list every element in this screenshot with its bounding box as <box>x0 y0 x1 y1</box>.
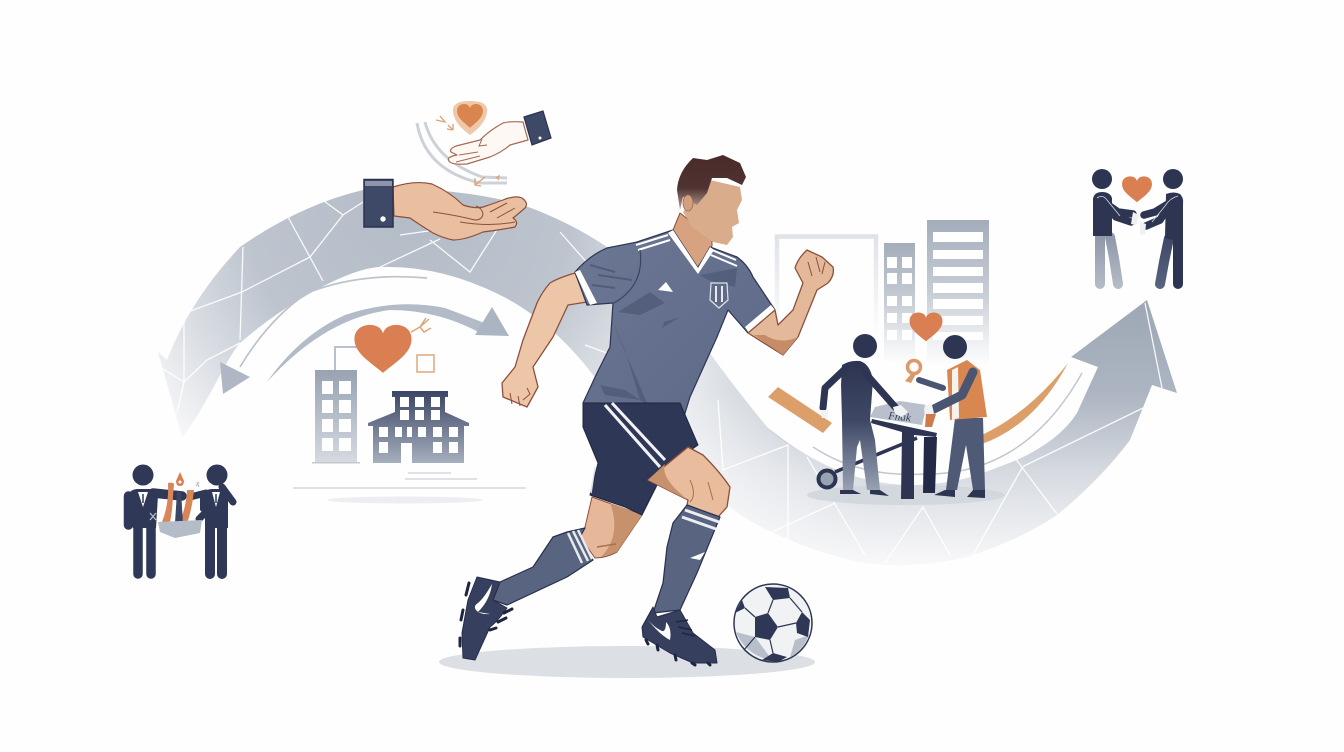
right arm <box>748 250 833 355</box>
icon: heart <box>1122 176 1152 202</box>
head <box>677 155 746 245</box>
front boot <box>642 607 717 665</box>
document <box>870 401 927 425</box>
back boot <box>460 577 512 660</box>
tower building <box>312 370 360 464</box>
ground lines <box>293 473 526 488</box>
document: Fnak <box>887 410 913 424</box>
figure: left person <box>128 464 182 574</box>
upper open hand <box>448 111 551 164</box>
hands exchanging a heart <box>364 101 551 240</box>
back leg <box>493 497 642 605</box>
jersey shading folds <box>600 268 737 405</box>
heart <box>354 325 412 373</box>
figure: left man <box>820 334 908 496</box>
inner curved arrow with triangular head <box>220 277 427 394</box>
icon: orange key ring <box>905 360 920 383</box>
tall tower <box>927 220 989 368</box>
orange arc band <box>768 363 1082 474</box>
crest <box>710 283 728 308</box>
figure: right man in orange vest <box>919 335 987 498</box>
logo triangle <box>658 282 673 292</box>
right city buildings <box>777 220 989 368</box>
small pincer icon <box>411 318 431 332</box>
lower open hand <box>364 180 526 240</box>
school building <box>368 391 469 463</box>
figure: right person <box>190 464 233 574</box>
football player <box>460 155 833 665</box>
neck <box>673 213 712 268</box>
motion arcs <box>417 122 507 183</box>
small square <box>417 355 434 372</box>
heart badge <box>453 101 487 135</box>
swoosh: left arc band <box>158 189 692 440</box>
top right pair of figures with heart <box>1092 169 1183 284</box>
mid tower <box>884 243 915 365</box>
gift box with sticks <box>150 472 202 538</box>
football <box>734 584 812 662</box>
middle scene: people signing at a table <box>807 312 1005 505</box>
figure: right person <box>1140 169 1183 284</box>
outline frame building <box>777 236 876 340</box>
left pair of figures with box <box>128 464 233 574</box>
front leg <box>648 447 730 613</box>
small orange arrows <box>436 116 499 186</box>
thick curved arrow <box>267 304 509 382</box>
swoosh: right rising arrow band <box>640 300 1177 565</box>
icon: heart <box>910 312 942 341</box>
table with wheel <box>818 419 937 499</box>
left arm <box>502 273 587 407</box>
connector line <box>335 347 360 370</box>
shorts <box>583 403 698 515</box>
figure: left person <box>1092 169 1139 284</box>
left building with heart <box>293 318 526 504</box>
player shadow <box>439 646 815 678</box>
jersey <box>575 230 775 423</box>
